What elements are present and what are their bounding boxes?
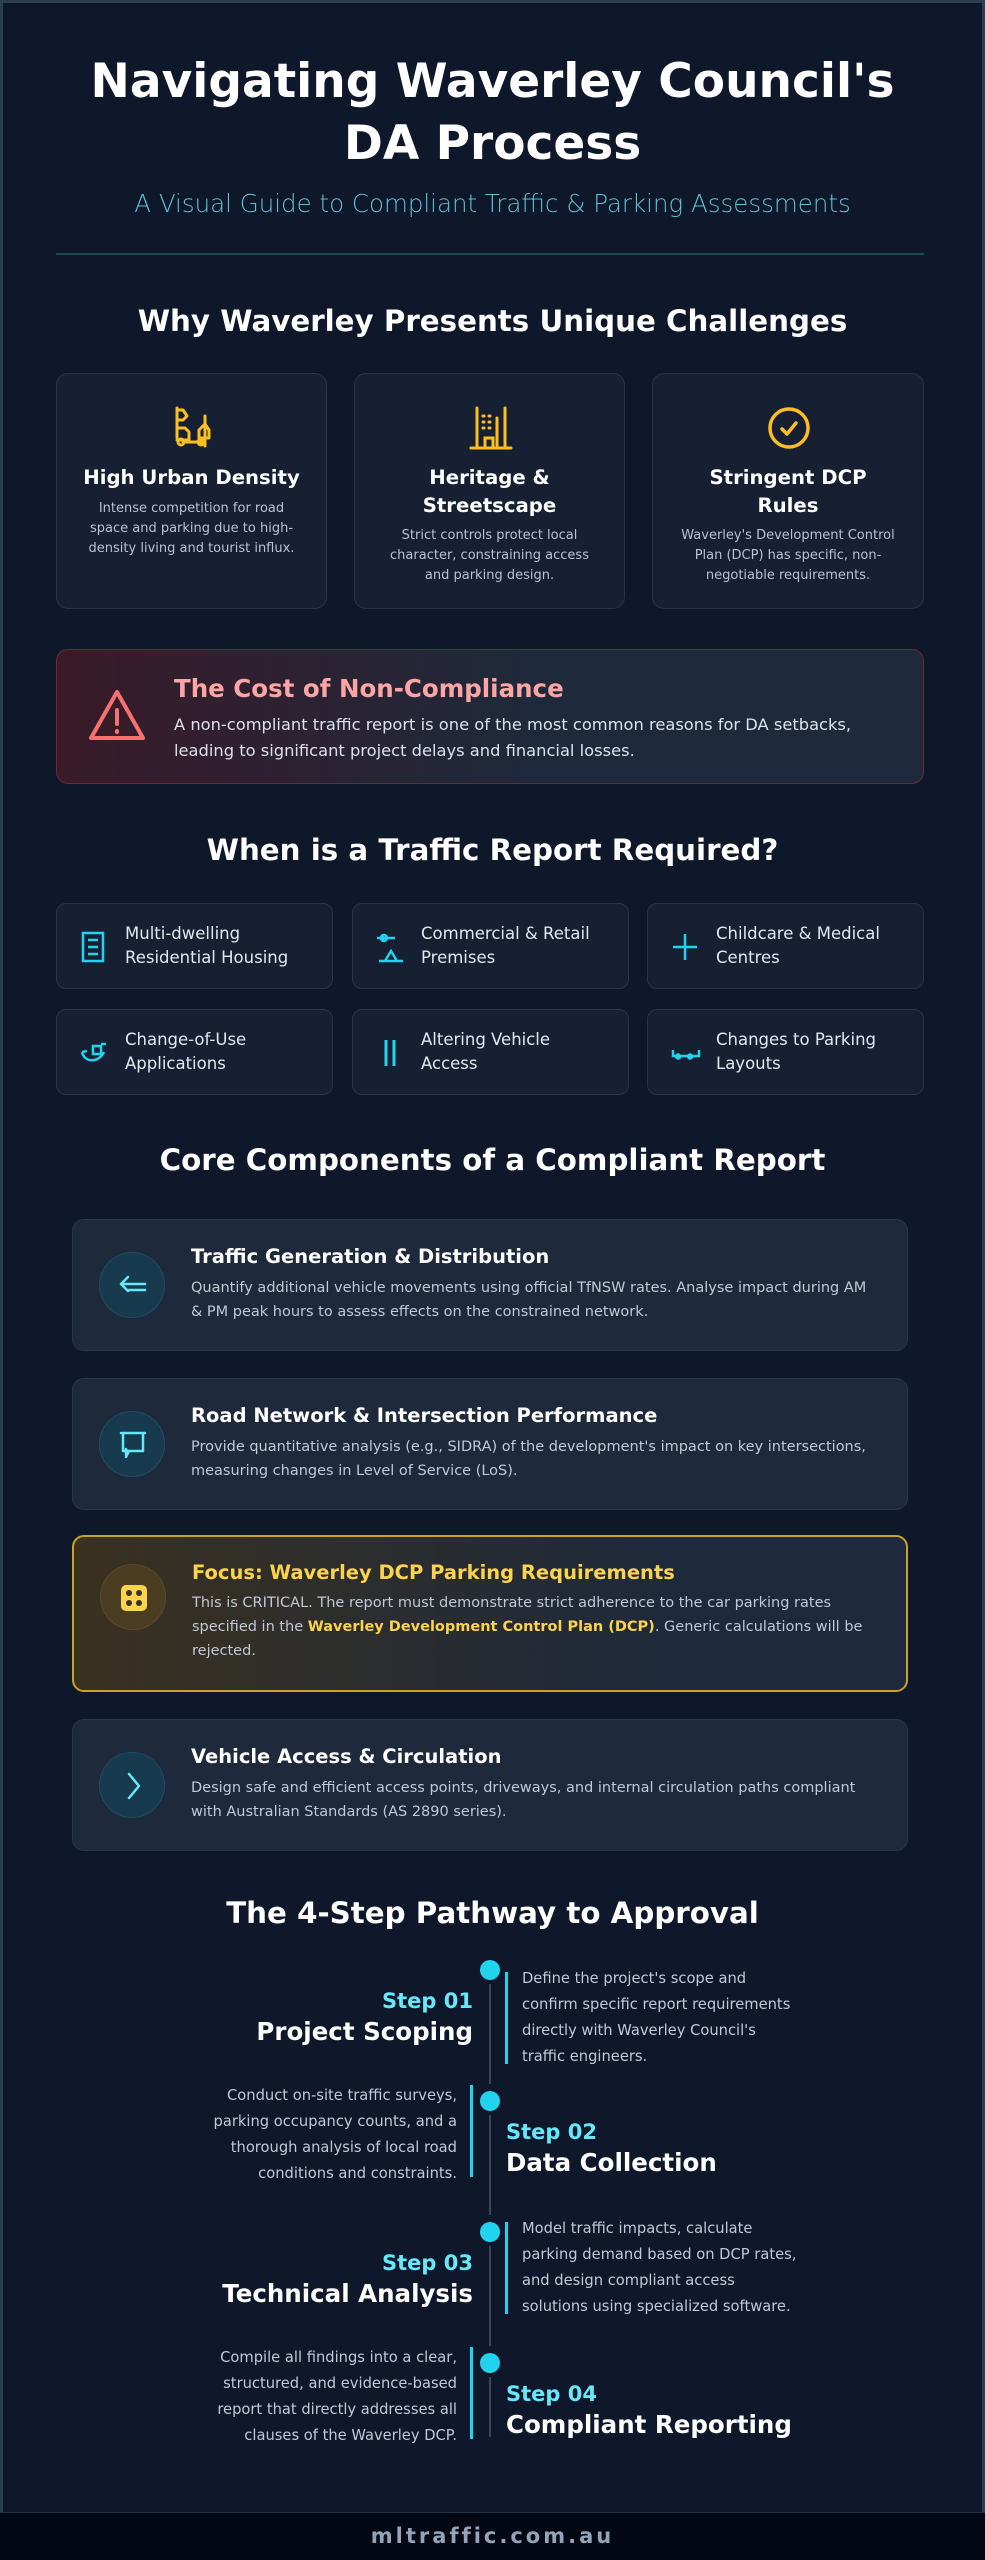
title: Road Network & Intersection Performance [191, 1404, 657, 1427]
panel: traffic generation [72, 1219, 908, 1351]
card text: Intense competition for road space and parking due to high-density living and tourist influx. [89, 501, 294, 556]
item: multi-dwelling: Multi-dwelling [125, 924, 240, 943]
card title: Rules [758, 494, 818, 517]
step 01: Define the project's scope and confirm specific report requirements directly with Waverley Council's traffic engineers. [522, 1970, 790, 2065]
item: commercial: Commercial & Retail [421, 924, 590, 943]
item: childcare: Centres [716, 948, 780, 967]
item: vehicle access: Altering Vehicle [421, 1030, 550, 1049]
step 01 [256, 1960, 790, 2084]
text: Design safe and efficient access points, driveways, and internal circulation paths compliant with Australian Standards (AS 2890 series). [191, 1780, 855, 1820]
card text: Strict controls protect local character, constraining access and parking design. [390, 528, 589, 583]
item: parking layouts: Changes to Parking [716, 1030, 876, 1049]
icon: building [470, 406, 512, 450]
step 01: Step 01 [382, 1989, 473, 2013]
icon: board [99, 1411, 165, 1477]
icon: chevron [99, 1752, 165, 1818]
card title [423, 466, 556, 517]
step 03: Technical Analysis [222, 2279, 473, 2308]
callout title: The Cost of Non-Compliance [174, 674, 564, 703]
callout text: A non-compliant traffic report is one of the most common reasons for DA setbacks, leading to significant project delays and financial losses. [174, 715, 851, 760]
card text: Waverley's Development Control Plan (DCP) has specific, non-negotiable requirements. [681, 528, 895, 583]
footer: mltraffic.com.au [371, 2524, 614, 2548]
heading: when required: When is a Traffic Report Required? [207, 833, 778, 867]
step 04: Compile all findings into a clear, structured, and evidence-based report that directly addresses all clauses of the Waverley DCP. [217, 2349, 457, 2444]
text: Quantify additional vehicle movements using official TfNSW rates. Analyse impact during AM & PM peak hours to assess effects on the constrained network. [191, 1280, 866, 1320]
item: childcare [647, 903, 924, 989]
title: Navigating Waverley Council's [91, 54, 894, 109]
grid: triggers [56, 903, 924, 1095]
icon: arrows [99, 1252, 165, 1318]
card title: Heritage & [429, 466, 550, 489]
step 02: Data Collection [506, 2148, 717, 2177]
step 02 [214, 2085, 717, 2215]
panel: dcp parking focus [72, 1535, 908, 1692]
title: DA Process [344, 116, 641, 171]
item: vehicle access [352, 1009, 629, 1095]
subtitle: A Visual Guide to Compliant Traffic & Parking Assessments [134, 189, 851, 218]
title [91, 54, 894, 171]
timeline [214, 1960, 796, 2444]
step 03: Step 03 [382, 2251, 473, 2275]
title: Vehicle Access & Circulation [191, 1745, 502, 1768]
icon: dice [100, 1564, 166, 1630]
item: childcare: Childcare & Medical [716, 924, 880, 943]
card title: High Urban Density [83, 466, 300, 489]
step 01: Project Scoping [256, 2017, 473, 2046]
item: change of use: Change-of-Use [125, 1030, 246, 1049]
step 04: Compliant Reporting [506, 2410, 792, 2439]
panel: dcp rules [652, 373, 924, 609]
heading: core components: Core Components of a Compliant Report [160, 1143, 825, 1177]
item: commercial [352, 903, 629, 989]
panel: road network [72, 1378, 908, 1510]
icon: check [768, 407, 810, 449]
item: multi-dwelling [56, 903, 333, 989]
item: multi-dwelling: Residential Housing [125, 948, 288, 967]
item: parking layouts: Layouts [716, 1054, 781, 1073]
panel: heritage [354, 373, 625, 609]
step 04 [217, 2347, 792, 2444]
icon: traffic [176, 406, 210, 448]
card title: Stringent DCP [709, 466, 866, 489]
item: change of use [56, 1009, 333, 1095]
card title [709, 466, 866, 517]
panel: high urban density [56, 373, 327, 609]
item: vehicle access: Access [421, 1054, 478, 1073]
card title: Streetscape [423, 494, 556, 517]
item: commercial: Premises [421, 948, 495, 967]
step 03: Model traffic impacts, calculate parking demand based on DCP rates, and design compliant access solutions using specialized software. [522, 2220, 796, 2315]
icon: warning [88, 690, 145, 740]
step 02: Step 02 [506, 2120, 597, 2144]
callout: cost of non-compliance [56, 649, 924, 784]
text: This is CRITICAL. The report must demonstrate strict adherence to the car parking rates specified in the Waverley Development Control Plan (DCP). Generic calculations will be rejected. [192, 1595, 862, 1659]
text: Provide quantitative analysis (e.g., SIDRA) of the development's impact on key intersections, measuring changes in Level of Service (LoS). [191, 1439, 866, 1479]
title: Focus: Waverley DCP Parking Requirements [192, 1561, 675, 1584]
step 02: Conduct on-site traffic surveys, parking occupancy counts, and a thorough analysis of local road conditions and constraints. [214, 2087, 457, 2182]
step 03 [222, 2220, 796, 2346]
item: parking layouts [647, 1009, 924, 1095]
item: change of use: Applications [125, 1054, 226, 1073]
title: Traffic Generation & Distribution [191, 1245, 549, 1268]
step 04: Step 04 [506, 2382, 597, 2406]
panel: vehicle access [72, 1719, 908, 1851]
heading: pathway: The 4-Step Pathway to Approval [226, 1896, 759, 1930]
footer [0, 2512, 985, 2560]
heading: why waverley: Why Waverley Presents Unique Challenges [138, 304, 847, 338]
